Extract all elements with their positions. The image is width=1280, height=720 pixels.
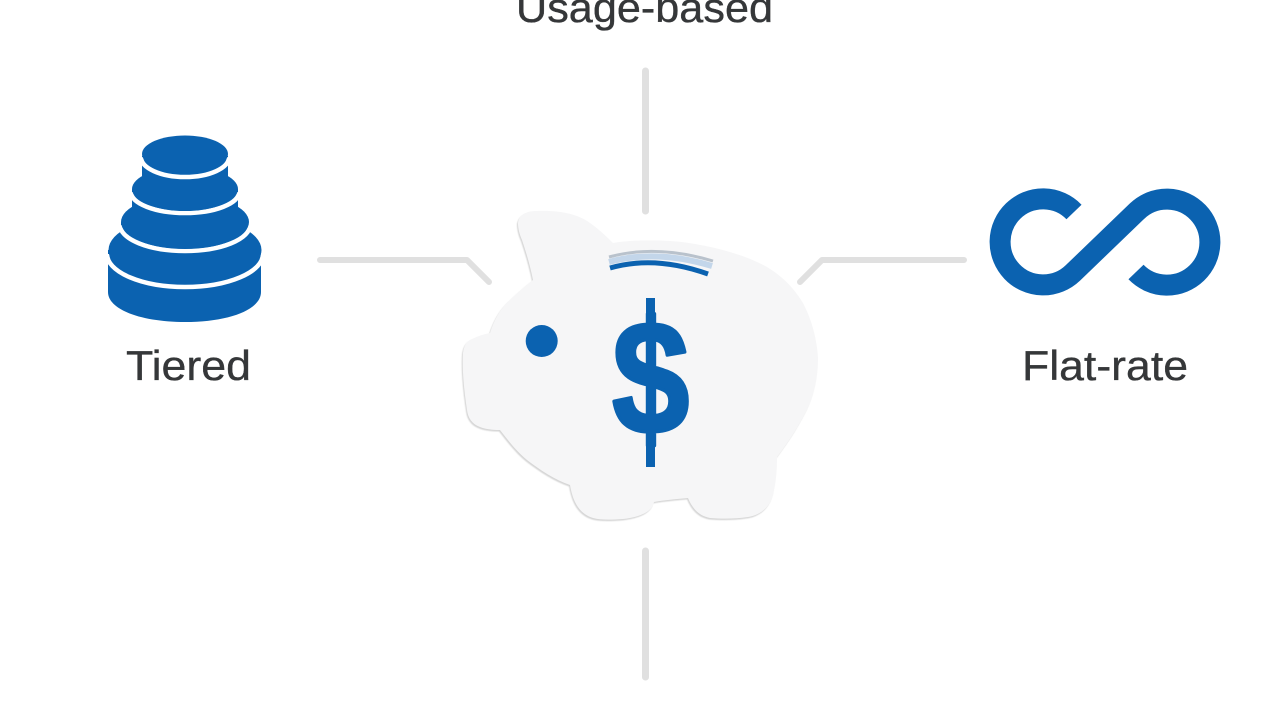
label: Tiered: Tiered [126, 342, 251, 389]
piggy bank body [463, 211, 818, 520]
connector: bottom [642, 551, 649, 677]
connector: left [320, 260, 489, 282]
dollar sign: $ [612, 288, 689, 468]
label: Flat-rate: Flat-rate [1022, 342, 1188, 389]
piggy bank shadow [462, 212, 817, 521]
icon: piggy bank [462, 211, 818, 521]
eye [526, 325, 558, 357]
connector: right [800, 260, 964, 282]
connector: top [642, 71, 649, 211]
coin slot [609, 251, 713, 274]
icon: infinity loop [1000, 199, 1210, 285]
icon: tiered stack [107, 136, 263, 322]
